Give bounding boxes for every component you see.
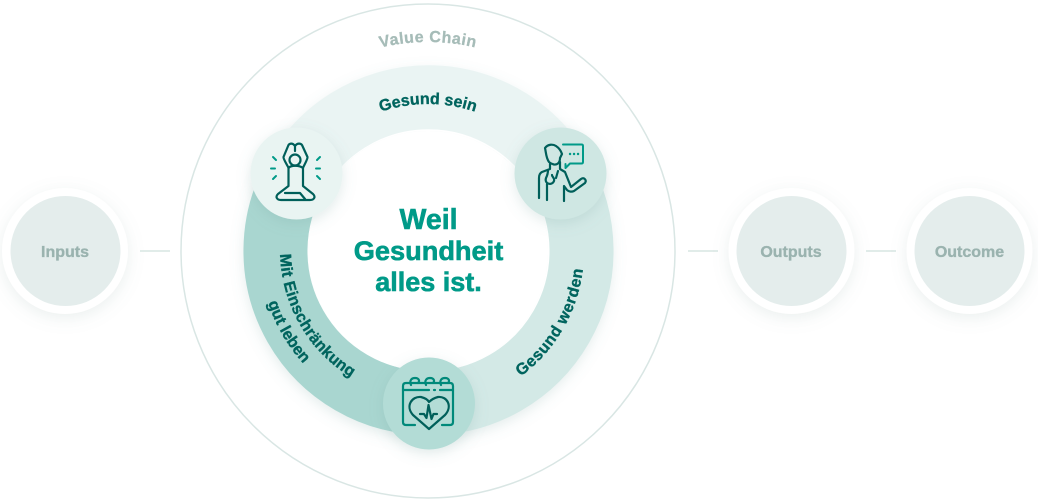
icon: doctor — [514, 128, 606, 220]
center heading: alles ist. — [375, 267, 482, 297]
label: Gesund werden: Gesund werden — [516, 269, 583, 374]
icon: calendar heart — [383, 358, 475, 450]
segment: Gesund werden — [428, 173, 582, 403]
icon: yoga — [250, 128, 342, 220]
main cycle ring — [275, 97, 582, 403]
label: Mit Einschränkung: Mit Einschränkung — [280, 254, 355, 378]
right node: Outcome — [906, 188, 1032, 314]
segment: Gesund sein — [297, 97, 560, 173]
left node: Inputs: Inputs — [41, 244, 89, 261]
left node: Inputs — [2, 188, 128, 314]
value chain label: Value Chain — [378, 30, 476, 48]
label: Gesund sein: Gesund sein — [379, 92, 476, 112]
center heading — [354, 204, 503, 297]
center circle — [308, 131, 548, 371]
segment: Mit Einschränkung gut leben — [275, 173, 428, 403]
value chain outer ring — [181, 4, 675, 498]
center heading: Gesundheit — [354, 235, 503, 266]
right node: Outputs — [728, 188, 854, 314]
right node: Outputs: Outputs — [760, 244, 822, 261]
center heading: Weil — [399, 204, 458, 236]
label: gut leben: gut leben — [266, 301, 308, 364]
right node: Outcome: Outcome — [935, 244, 1004, 261]
